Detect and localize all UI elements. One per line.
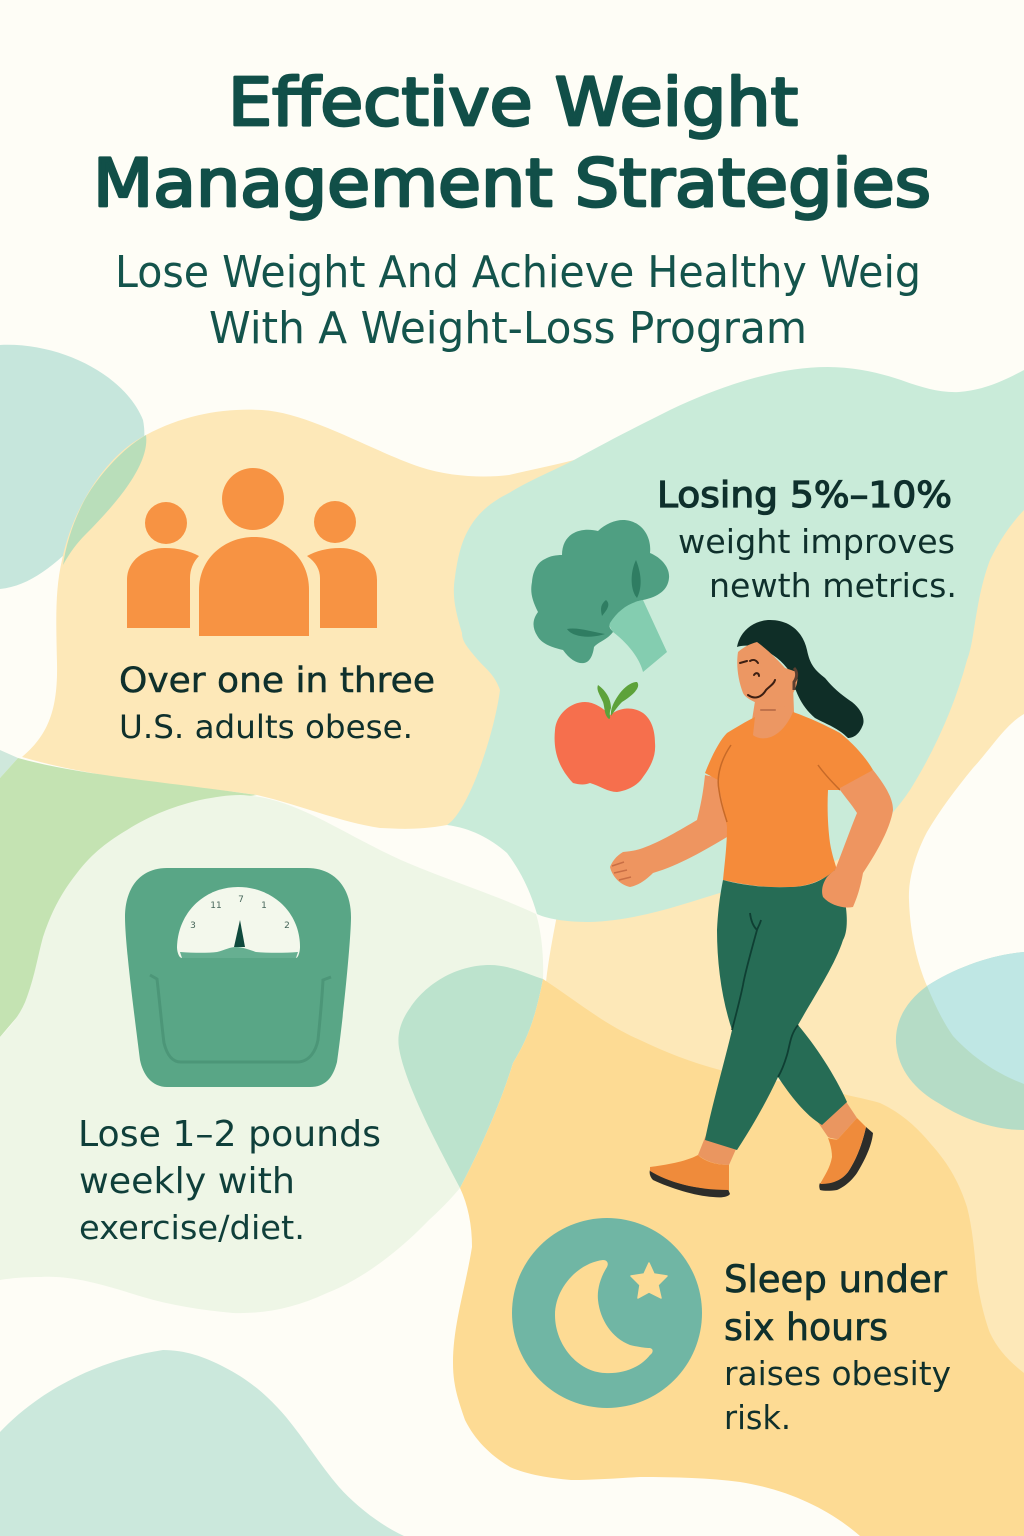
stat text: pounds: weekly with [79,1161,295,1202]
stat text: sleep: raises obesity [724,1354,951,1393]
subtitle: With A Weight-Loss Program [209,303,807,354]
stat text: losing weight [657,475,957,605]
illustration: walking woman [610,620,893,1197]
icon: moon [512,1218,702,1408]
shoe soles [650,1127,873,1197]
face details [740,660,775,710]
icon: scale: 2 [284,921,290,931]
trousers [705,870,847,1150]
front arm [822,770,893,908]
title [93,64,931,222]
stat text: sleep: Sleep under [724,1258,948,1301]
stat text: obesity: U.S. adults obese. [119,708,413,746]
hair [737,620,864,738]
icon: broccoli [531,520,669,672]
stat text: obesity [119,661,435,746]
ear detail [794,668,797,690]
stat text: pounds [78,1114,381,1247]
title: Effective Weight [228,64,798,141]
stat text: losing weight: weight improves [678,522,955,561]
icon: scale [125,868,351,1087]
subtitle [115,247,921,354]
icon: scale: 1 [261,901,267,911]
shirt creases [718,745,840,822]
stat text: pounds: exercise/diet. [79,1208,305,1247]
stat text: sleep: six hours [724,1306,888,1349]
head [737,642,798,707]
icon: scale: 3 [190,921,196,931]
icon: apple [555,682,655,792]
back shoe [820,1118,866,1184]
front shoe [650,1155,729,1190]
stat text: obesity: Over one in three [119,661,435,701]
shirt [705,712,873,887]
trouser lines [732,913,798,1077]
stat text: losing weight: newth metrics. [709,566,957,605]
stat text: sleep: risk. [724,1398,791,1437]
ankles [698,1100,857,1165]
title: Management Strategies [93,145,931,222]
neck [748,685,800,748]
icon: scale: 7 [238,895,244,905]
stat text: sleep [724,1258,951,1437]
icon: scale: 11 [210,901,222,911]
background blobs [0,345,1024,1536]
hand lines [612,862,631,880]
icon: people [127,468,377,636]
stat text: losing weight: Losing 5%–10% [657,475,952,516]
back arm [610,775,727,887]
subtitle: Lose Weight And Achieve Healthy Weig [115,247,921,298]
stat text: pounds: Lose 1–2 pounds [78,1114,381,1155]
